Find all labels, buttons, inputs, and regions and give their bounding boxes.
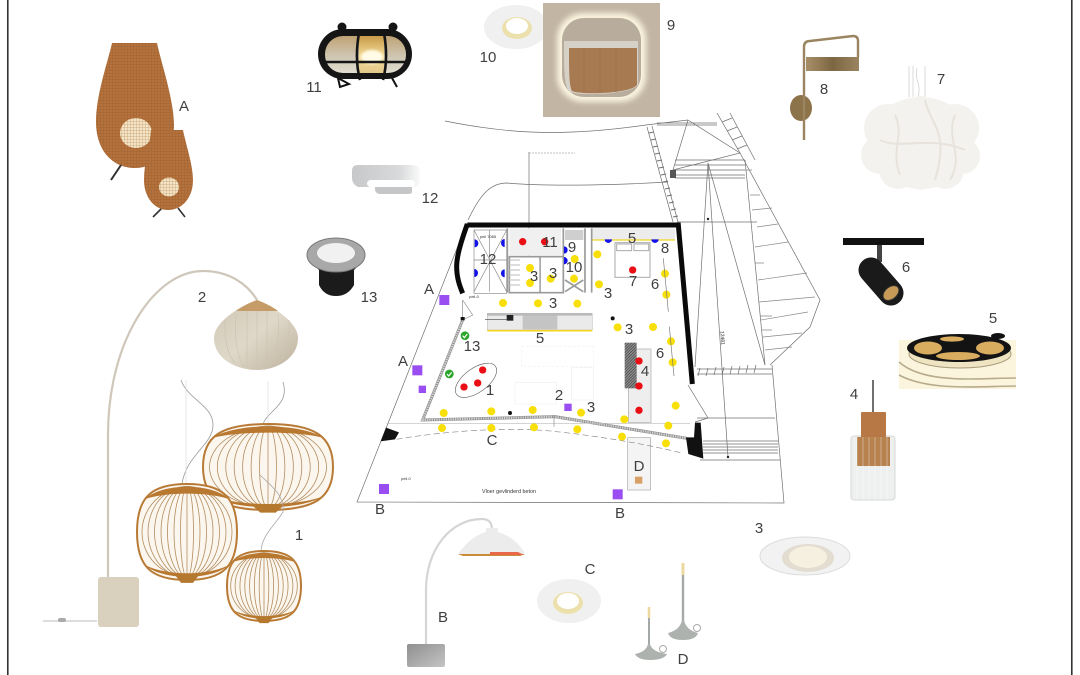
label 13: 13 bbox=[361, 289, 377, 306]
plan labels: 9 bbox=[568, 239, 576, 256]
label 1: 1 bbox=[295, 527, 303, 544]
label 11: 11 bbox=[306, 79, 322, 96]
plan labels: 6 bbox=[656, 345, 664, 362]
label A: A bbox=[179, 98, 189, 115]
dark stair node bbox=[670, 170, 676, 178]
floor plan bbox=[357, 113, 820, 522]
label 8: 8 bbox=[820, 81, 828, 98]
plan labels: 4 bbox=[641, 363, 649, 380]
terrace candle marker bbox=[635, 477, 642, 484]
plan labels: 11 bbox=[542, 234, 558, 251]
plan labels: C bbox=[487, 432, 498, 449]
label C: C bbox=[585, 561, 596, 578]
floor note: concrete: Vloer gevlinderd beton bbox=[482, 489, 536, 495]
plan labels: 3 bbox=[549, 295, 557, 312]
bathroom and wet rooms bbox=[507, 228, 675, 293]
label 2: 2 bbox=[198, 289, 206, 306]
label D: D bbox=[678, 651, 689, 668]
label 7: 7 bbox=[937, 71, 945, 88]
plan labels: 1 bbox=[486, 382, 494, 399]
label 12: 12 bbox=[422, 190, 438, 207]
lamp 1: spoke pendant group bbox=[137, 380, 333, 623]
lamp 5: LED strip reel bbox=[899, 333, 1016, 389]
label 9: 9 bbox=[667, 17, 675, 34]
label 6: 6 bbox=[902, 259, 910, 276]
lamp 11: bulkhead wall light bbox=[318, 22, 412, 87]
plan labels: 3 bbox=[625, 321, 633, 338]
island bbox=[628, 349, 651, 422]
label 3: 3 bbox=[755, 520, 763, 537]
floor plan interior, scaled group bbox=[379, 224, 703, 499]
lamp D: portable candle lamps bbox=[635, 563, 700, 660]
lamp A: wicker floor lamps bbox=[96, 43, 193, 217]
bedroom strip light bbox=[592, 238, 675, 242]
plan labels: 2 bbox=[555, 387, 563, 404]
plan labels: 5 bbox=[536, 330, 544, 347]
plan labels: 3 bbox=[530, 268, 538, 285]
black house walls bbox=[457, 224, 692, 384]
small spoke cage bbox=[227, 551, 301, 623]
hatched cooker block bbox=[625, 343, 637, 388]
plan labels bbox=[375, 230, 669, 522]
black points bbox=[461, 316, 615, 415]
label B: B bbox=[438, 609, 448, 626]
terrace block D bbox=[628, 438, 651, 490]
lamp C: outdoor downlight bbox=[537, 579, 601, 623]
dimension points bbox=[707, 218, 729, 458]
kitchen block bbox=[485, 313, 592, 331]
glazed walls bbox=[387, 300, 690, 453]
plan labels: 3 bbox=[587, 399, 595, 416]
plan labels: B bbox=[615, 505, 625, 522]
track lines bbox=[663, 258, 674, 376]
lamp 8: brass wall sconce bbox=[790, 36, 859, 140]
black wedge pillars bbox=[381, 423, 703, 459]
plan labels: 8 bbox=[661, 240, 669, 257]
lamp 13: ground spot bbox=[307, 238, 365, 296]
plan labels: 10 bbox=[566, 259, 582, 276]
lamp B: terrace heater lamp bbox=[407, 519, 525, 667]
lamp 3: tilted downlight bbox=[760, 537, 850, 575]
plan labels: B bbox=[375, 501, 385, 518]
label 10: 10 bbox=[480, 49, 496, 66]
plan labels: 5 bbox=[628, 230, 636, 247]
lamp 7: cloud pendant bbox=[861, 66, 980, 190]
lamp 6: track spot bbox=[843, 238, 924, 303]
faint sofa and table bbox=[515, 347, 593, 404]
lamp 4: fluted glass pendant bbox=[851, 380, 895, 500]
plan labels: A bbox=[398, 353, 408, 370]
lamp 2: arc floor lamp bbox=[43, 271, 298, 627]
plan labels: 12 bbox=[480, 251, 496, 268]
plan labels: 6 bbox=[651, 276, 659, 293]
green check markers bbox=[445, 331, 469, 378]
light markers blue bbox=[474, 239, 659, 277]
floor note: entry level: peil-0 bbox=[469, 294, 480, 299]
light markers yellow bbox=[438, 250, 680, 447]
plan labels: 7 bbox=[629, 273, 637, 290]
plan labels: A bbox=[424, 281, 434, 298]
medium spoke cage bbox=[137, 484, 237, 583]
lamp 12: wall washer bbox=[352, 165, 420, 194]
label 4: 4 bbox=[850, 386, 858, 403]
bed bbox=[615, 243, 650, 277]
site outline drawing bbox=[357, 113, 820, 503]
lamp 10: recessed downlight bbox=[484, 5, 548, 49]
floor note: level: peil-0 bbox=[401, 476, 412, 481]
light markers red bbox=[460, 238, 643, 414]
label 5: 5 bbox=[989, 310, 997, 327]
large spoke cage bbox=[203, 424, 333, 513]
lamp 9: backlit mirror bbox=[543, 3, 660, 117]
dining oval bbox=[450, 357, 502, 404]
plan labels: 3 bbox=[604, 285, 612, 302]
plan labels: 3 bbox=[549, 265, 557, 282]
staircase bbox=[474, 230, 507, 293]
dimension label: 12481 bbox=[719, 331, 725, 345]
outdoor markers purple bbox=[379, 295, 623, 499]
plan labels: 13 bbox=[464, 338, 480, 355]
floor note: stair level: peil 7085 bbox=[480, 234, 497, 239]
plan labels: D bbox=[634, 458, 645, 475]
